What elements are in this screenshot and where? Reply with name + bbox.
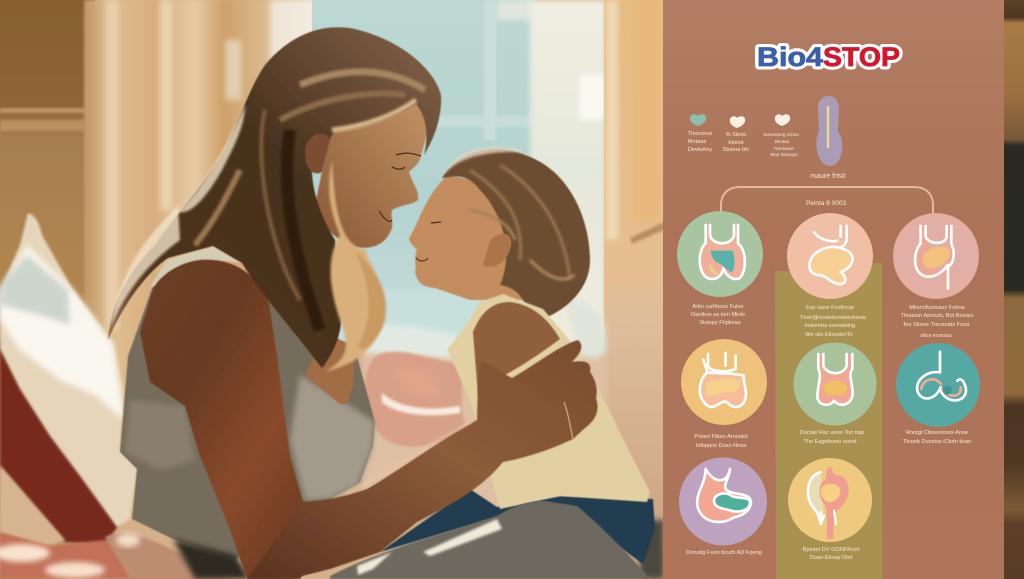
circle 2: peach — [787, 213, 873, 299]
panel: gut health infographic — [663, 0, 1004, 579]
text: top labels: Stoona bfc — [723, 147, 750, 153]
text: top labels: Motaas — [688, 139, 706, 145]
logo: Bio4STOP: STOP — [823, 42, 900, 72]
circle 1 caption — [691, 304, 745, 326]
logo: Bio4STOP: STOP — [823, 42, 900, 72]
circle 5 caption: Tho Eagotosoo ooost — [803, 439, 857, 445]
circle 7 caption: Donsdg Fuon bcurb AD Fpeng — [686, 550, 762, 556]
circle 8 caption: Bjontet DV OONFRoot — [803, 547, 860, 553]
circle 8 caption: Doao Ehoay Dtot — [810, 555, 853, 561]
logo: Bio4STOP: Bio4 — [757, 42, 823, 72]
circle 4 caption: Pvlant Ftbon Arnoalol — [694, 434, 748, 440]
child's top — [447, 294, 650, 509]
circle 2 caption — [800, 305, 867, 338]
mother's forearm and hand — [247, 340, 598, 579]
bracket connector — [721, 187, 933, 213]
circle 4 caption: Istbppos Duso Nosa — [696, 443, 747, 449]
circle 2 caption: Fop oune Fcofincar — [806, 305, 854, 311]
circle 6 caption — [903, 430, 971, 445]
photo background room — [0, 0, 664, 579]
circle 3 caption — [900, 305, 974, 339]
icon: teal heart — [690, 114, 706, 126]
text: top labels: Thoconus — [688, 131, 712, 137]
circle 5: green — [794, 342, 876, 426]
tank top — [120, 286, 375, 560]
child's head — [409, 147, 590, 318]
hair highlights — [195, 72, 425, 330]
circle 4: yellow — [681, 339, 767, 425]
blond waves — [325, 160, 386, 372]
text: top labels — [688, 131, 799, 157]
mother's face — [315, 95, 430, 248]
text: top labels: trlonst — [728, 140, 744, 146]
text: top labels: Devtwhsy — [688, 147, 712, 153]
shoulder strap — [150, 246, 242, 287]
text: top labels: Nontosas — [774, 146, 794, 151]
text: top labels: Senoamng Clooa — [763, 132, 799, 137]
text: top labels: % Slooo — [726, 132, 746, 138]
logo: Bio4STOP: Bio4 — [757, 42, 823, 72]
ring on hand — [564, 402, 573, 440]
circle 2 caption: We stlc Eltoodo/iTe — [805, 332, 853, 338]
chest skin — [305, 335, 355, 404]
circle 3 caption: Tee Slotee Treosoats Fooa — [903, 322, 970, 328]
icon: white heart — [730, 116, 745, 128]
caption under tract: maure frtsö — [810, 173, 846, 180]
circle 1 caption: Stoispy Fhpknsa — [699, 320, 742, 326]
circle 2 caption: Thah@ocutnbontaoufonsa — [800, 315, 867, 321]
circle 1: green — [677, 211, 763, 297]
lit edge of forearm — [345, 422, 472, 494]
mother's smile and eye — [379, 153, 421, 221]
text: top labels: Bsotas — [775, 139, 790, 144]
mother's knee — [330, 501, 650, 579]
logo: Bio4STOP — [757, 42, 900, 72]
circle 5 caption: Ductair Rac anoo Ton ttap — [800, 430, 864, 436]
blurred hand in background — [365, 352, 465, 447]
icon: white heart — [775, 114, 790, 126]
mother's upper arm — [140, 260, 335, 579]
circle 3 caption: otkor ecnesao — [920, 333, 952, 339]
circle 4 caption — [694, 434, 748, 449]
mother's hair — [108, 27, 441, 368]
backlit hair glow — [110, 105, 245, 330]
circle 6: teal — [896, 343, 980, 427]
olive column backdrop — [775, 263, 882, 579]
circle 5 caption — [800, 430, 864, 445]
circle 7: lilac — [679, 458, 767, 546]
child's jeans — [380, 489, 655, 564]
ear — [305, 134, 330, 173]
circle 6 caption: Rnotgt Cboeostoox Anoe — [906, 430, 968, 436]
circle 1 caption: Oantkve sa tom Mlote — [691, 312, 745, 318]
child's arm — [473, 302, 560, 395]
circle 2 caption: Hainmba eonoabtng — [805, 323, 855, 329]
photo: mother and child by window — [0, 0, 664, 579]
circle 3 caption: Mkorcifurnoasc Fohna — [909, 305, 966, 311]
text: top labels: Mep Notcvpn — [770, 152, 798, 157]
circle 3 caption: Thoason Anrouts, Bot Boears — [900, 313, 974, 319]
circle 6 caption: Tlounb Duoctss iCtotn tixao — [903, 439, 971, 445]
circle 8 caption — [803, 547, 860, 561]
circle 8: yellow — [788, 458, 872, 542]
bracket label: Pelnta 8 0003 — [806, 200, 846, 207]
circle 3: pink — [893, 213, 979, 299]
pillows — [0, 213, 230, 579]
wooden strip at right edge — [1004, 0, 1024, 579]
icon: lilac digestive tract — [816, 96, 842, 166]
circle 1 caption: Arlto curlthoos Fulne — [692, 304, 744, 310]
sunlight patches on knee — [357, 519, 502, 575]
